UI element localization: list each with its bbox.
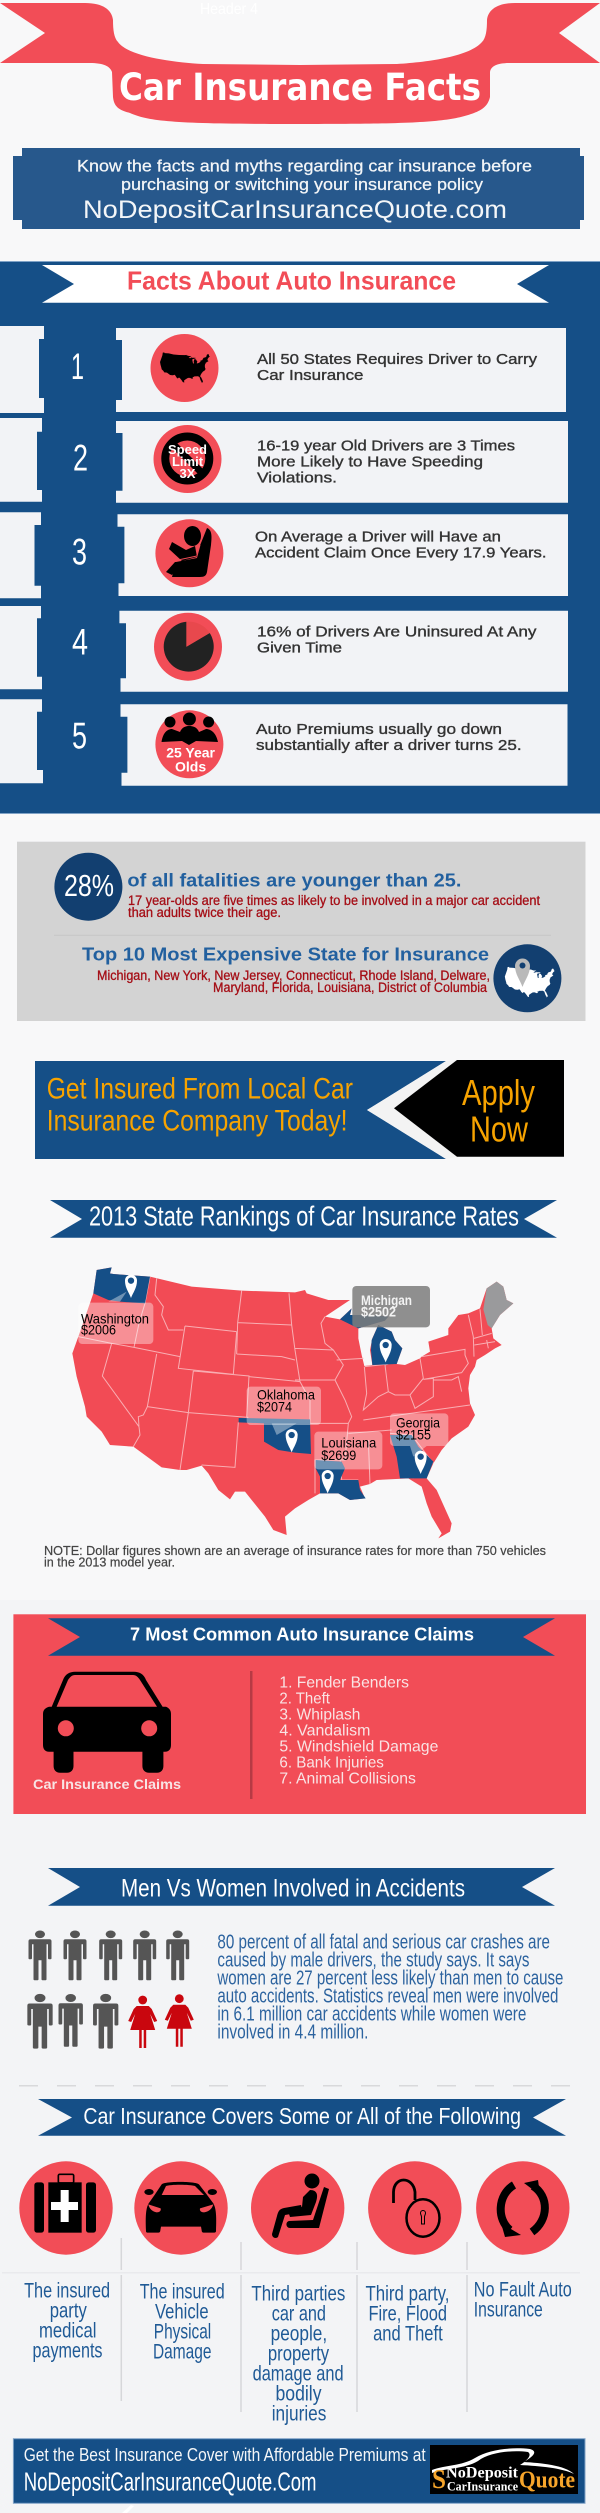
callout labels: Oklahoma <box>257 1386 315 1402</box>
coverage column: third parties: car and <box>272 2303 326 2326</box>
heading ribbon: men vs women <box>48 1868 555 1906</box>
fact 3: 3 <box>72 531 87 572</box>
fact 3 <box>0 512 568 598</box>
callout pointers <box>108 1292 427 1457</box>
callout labels: Louisiana <box>321 1435 376 1451</box>
map note <box>44 1543 546 1570</box>
footer text: NoDepositCarInsuranceQuote.Com <box>24 2467 316 2497</box>
map of state rankings <box>72 1267 513 1538</box>
fact 1: All 50 States Requires Driver to Carry <box>257 351 538 368</box>
coverage column: vehicle physical damage: Physical <box>154 2321 211 2344</box>
pictogram: men and women <box>27 1930 194 2049</box>
intro text: Know the facts and myths regarding car insurance before <box>77 157 532 176</box>
stat text <box>127 870 540 920</box>
coverage column: vehicle physical damage: The insured <box>140 2281 225 2304</box>
coverage column: medical payments: party <box>50 2300 87 2323</box>
map note: NOTE: Dollar figures shown are an average of insurance rates for more than 750 vehicles <box>44 1543 546 1558</box>
icon: group of drivers: Olds <box>175 759 206 775</box>
claims heading ribbon: 7 Most Common Auto Insurance Claims <box>130 1625 474 1645</box>
callout labels: $2502 <box>361 1304 396 1320</box>
fact 5: Auto Premiums usually go down <box>256 721 502 738</box>
icon: circular arrows <box>476 2161 570 2255</box>
coverage column: fire flood theft: and Theft <box>373 2323 443 2346</box>
logo: NoDeposit <box>446 2464 519 2482</box>
coverage column: vehicle physical damage <box>134 2161 228 2364</box>
icon: seated driver <box>155 519 223 587</box>
callout boxes <box>78 1303 448 1469</box>
claims list: 5. Windshield Damage <box>279 1739 439 1756</box>
coverage column: third parties: injuries <box>272 2403 326 2426</box>
section heading ribbon <box>42 265 549 303</box>
icon: usa map <box>150 334 218 402</box>
states highlighted: Washington, Oklahoma, Louisiana, Georgia, Michigan <box>93 1267 433 1500</box>
fact 5: substantially after a driver turns 25. <box>256 737 522 754</box>
claims list: 6. Bank Injuries <box>279 1755 384 1772</box>
fact 4: Given Time <box>257 640 342 657</box>
fact 4 <box>0 606 568 692</box>
coverage column: medical payments: medical <box>39 2320 96 2343</box>
logo: Quote <box>519 2468 575 2494</box>
title ribbon <box>0 1 600 124</box>
coverage column: medical payments <box>19 2161 113 2363</box>
coverage column: medical payments: payments <box>32 2340 102 2363</box>
call to action text: Now <box>470 1109 529 1150</box>
call to action text <box>47 1072 535 1150</box>
stat badge 28 percent <box>54 853 122 921</box>
intro text: purchasing or switching your insurance policy <box>121 175 484 194</box>
callout labels: $2699 <box>321 1447 356 1463</box>
stat text: than adults twice their age. <box>128 905 281 920</box>
callout labels: $2006 <box>81 1322 116 1338</box>
icon: car <box>134 2161 228 2255</box>
intro text <box>77 157 532 224</box>
coverage column: no fault: No Fault Auto <box>474 2279 572 2302</box>
icon: seated passenger <box>251 2161 344 2255</box>
fact 4: 16% of Drivers Are Uninsured At Any <box>257 624 537 641</box>
fact 1: Car Insurance <box>257 367 364 384</box>
call to action text: Insurance Company Today! <box>47 1105 347 1138</box>
logo: S <box>432 2464 446 2494</box>
coverage column: no fault: Insurance <box>474 2299 543 2322</box>
fact 1: 1 <box>71 346 84 387</box>
callout labels: Michigan <box>361 1292 412 1308</box>
footer text: Get the Best Insurance Cover with Affordable Premiums at <box>24 2445 426 2465</box>
fact 1 <box>0 326 566 413</box>
icon: speed limit: Limit <box>172 454 204 469</box>
fact 3: Accident Claim Once Every 17.9 Years. <box>255 545 546 562</box>
fact 2: 16-19 year Old Drivers are 3 Times <box>257 438 515 455</box>
heading ribbon: coverage: Car Insurance Covers Some or All of the Following <box>83 2103 521 2129</box>
callout labels: Washington <box>81 1310 149 1326</box>
callout labels: $2155 <box>396 1426 431 1442</box>
fact 5: 5 <box>72 715 87 756</box>
icon: speed limit: Speed <box>168 442 207 457</box>
fact 2: 2 <box>73 438 88 479</box>
logo: CarInsurance <box>447 2478 518 2494</box>
claims list: 4. Vandalism <box>279 1723 370 1740</box>
intro text: NoDepositCarInsuranceQuote.com <box>83 196 507 224</box>
claims list: 2. Theft <box>279 1691 330 1708</box>
icon: open padlock <box>368 2161 461 2255</box>
state borders <box>78 1277 495 1493</box>
stat text: of all fatalities are younger than 25. <box>127 870 461 891</box>
coverage column: third parties: people, <box>271 2323 327 2346</box>
claims list <box>279 1675 439 1788</box>
car icon caption: Car Insurance Claims <box>33 1776 181 1792</box>
fact 4: 4 <box>72 621 88 662</box>
title text: Car Insurance Facts <box>119 66 481 109</box>
callout labels <box>81 1292 440 1463</box>
call to action text: Apply <box>462 1072 535 1113</box>
icon: map with pin <box>493 944 561 1012</box>
icon: pie chart 16 percent <box>154 613 222 681</box>
icon: group of drivers: 25 Year <box>166 745 216 761</box>
heading ribbon: men vs women: Men Vs Women Involved in Accidents <box>121 1875 465 1903</box>
coverage column: vehicle physical damage: Damage <box>153 2341 212 2364</box>
icon: group of drivers <box>155 710 223 778</box>
map note: in the 2013 model year. <box>44 1555 175 1570</box>
map pins <box>125 1275 427 1493</box>
callout labels: $2074 <box>257 1399 292 1415</box>
coverage column: third parties: damage and <box>253 2363 344 2386</box>
stat badge 28 percent: 28% <box>64 868 114 903</box>
coverage column: no fault <box>474 2161 572 2322</box>
logo <box>430 2445 578 2494</box>
top 10 states text: Michigan, New York, New Jersey, Connecticut, Rhode Island, Delware, <box>97 968 490 983</box>
icon: speed limit <box>154 425 222 493</box>
claims list: 7. Animal Collisions <box>279 1771 416 1788</box>
claims list: 3. Whiplash <box>279 1707 360 1724</box>
coverage column: third parties: property <box>268 2343 329 2366</box>
fact 5 <box>0 699 568 786</box>
section heading ribbon: Facts About Auto Insurance <box>127 267 456 295</box>
coverage column: third parties <box>251 2161 345 2426</box>
coverage column: fire flood theft <box>366 2161 461 2346</box>
coverage column: third parties: Third parties <box>251 2283 345 2306</box>
coverage column: third parties: bodily <box>276 2383 322 2406</box>
top 10 states text: Maryland, Florida, Louisiana, District of Columbia <box>213 980 487 995</box>
fact 2: Violations. <box>257 470 337 487</box>
panel: facts about auto insurance <box>0 261 600 814</box>
intro banner <box>13 148 584 229</box>
call to action banner <box>35 1060 564 1159</box>
top 10 states text: Top 10 Most Expensive State for Insurance <box>82 944 489 965</box>
coverage column: vehicle physical damage: Vehicle <box>155 2301 209 2324</box>
heading ribbon: coverage <box>38 2099 566 2136</box>
callout labels: Georgia <box>396 1415 440 1431</box>
icon: speed limit: 3X <box>180 466 196 481</box>
coverage column: medical payments: The insured <box>24 2280 110 2303</box>
claims list: 1. Fender Benders <box>279 1675 409 1692</box>
icon: car front <box>43 1672 171 1773</box>
fact 3: On Average a Driver will Have an <box>255 529 501 546</box>
icon: first aid kit <box>19 2161 113 2255</box>
title ribbon: Header 4 <box>200 1 258 18</box>
footer banner <box>13 2439 585 2503</box>
stat text: 17 year-olds are five times as likely to be involved in a major car accident <box>128 893 540 908</box>
coverage column: fire flood theft: Third party, <box>366 2283 450 2306</box>
panel: common auto insurance claims <box>13 1614 586 1814</box>
fact 2: More Likely to Have Speeding <box>257 454 483 471</box>
call to action text: Get Insured From Local Car <box>47 1072 353 1105</box>
accident statistics text <box>217 1931 563 2043</box>
coverage column: fire flood theft: Fire, Flood <box>368 2303 447 2326</box>
fact 2 <box>0 418 568 503</box>
top 10 states text <box>82 944 490 995</box>
footer text <box>24 2445 426 2497</box>
panel: fatalities and expensive states <box>17 842 586 1021</box>
claims heading ribbon <box>48 1618 555 1656</box>
accident statistics text: involved in 4.4 million. <box>217 2021 368 2043</box>
